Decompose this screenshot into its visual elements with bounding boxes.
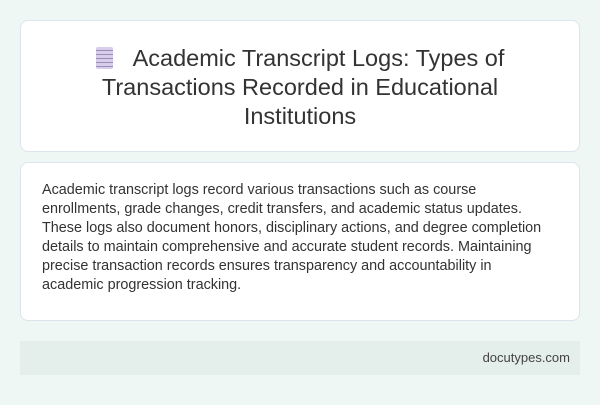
footer text: docutypes.com [483, 350, 570, 365]
footer [20, 341, 580, 375]
title: Academic Transcript Logs: Types of Transactions Recorded in Educational Institutions [102, 45, 504, 129]
title panel [20, 20, 580, 152]
description panel [20, 162, 580, 321]
description text: Academic transcript logs record various transactions such as course enrollments, grade changes, credit transfers, and academic status updates. These logs also document honors, disciplinary actions, and degree completion details to maintain comprehensive and accurate student records. Maintaining precise transaction records ensures transparency and accountability in academic progression tracking. [42, 182, 541, 293]
icon: scroll [96, 47, 113, 69]
